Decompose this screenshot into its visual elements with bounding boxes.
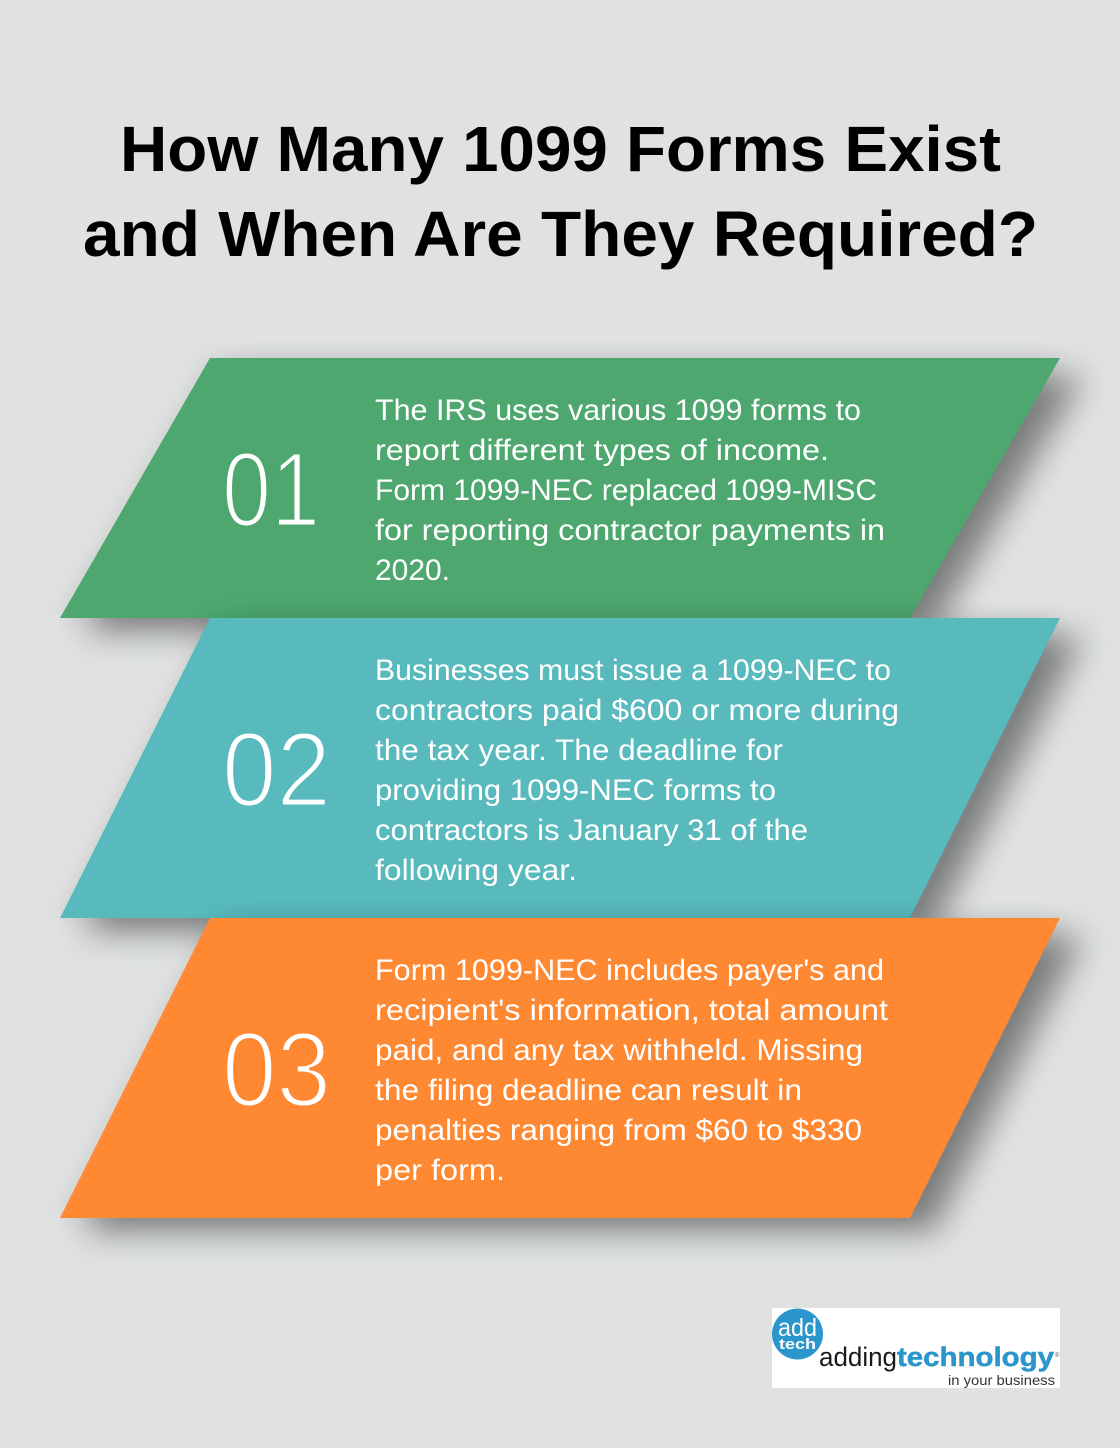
number 02: 02 — [222, 711, 331, 829]
logo: adding technology: ® — [1055, 1352, 1060, 1359]
text block: step 01: report different types of income. — [375, 434, 829, 467]
text block: step 03: penalties ranging from $60 to $330 — [375, 1114, 862, 1147]
text block: step 03: the filing deadline can result in — [375, 1074, 802, 1107]
icon: add tech circle: tech — [779, 1336, 816, 1353]
tagline: in your business — [948, 1372, 1055, 1388]
text block: step 01: The IRS uses various 1099 forms to — [375, 394, 861, 427]
panel: step 01 — [60, 358, 1060, 618]
wordmark: adding — [819, 1342, 897, 1372]
text block: step 02: following year. — [375, 854, 577, 887]
text block: step 02: contractors is January 31 of the — [375, 814, 808, 847]
text block: step 03 — [375, 954, 888, 1187]
text block: step 02: Businesses must issue a 1099-NEC to — [375, 654, 891, 687]
title: How Many 1099 Forms Exist — [120, 113, 1001, 185]
text block: step 02: contractors paid $600 or more during — [375, 694, 899, 727]
title — [83, 113, 1038, 270]
shape: orange parallelogram — [60, 918, 1060, 1218]
text block: step 02: the tax year. The deadline for — [375, 734, 783, 767]
text block: step 02: providing 1099-NEC forms to — [375, 774, 776, 807]
shape: teal parallelogram — [60, 618, 1060, 918]
text block: step 03: Form 1099-NEC includes payer's and — [375, 954, 884, 987]
text block: step 02 — [375, 654, 899, 887]
panel: step 03 — [60, 918, 1060, 1218]
icon: add tech circle — [772, 1308, 823, 1360]
title: and When Are They Required? — [83, 198, 1038, 270]
number 01: 01 — [222, 431, 320, 549]
panel: step 02 — [60, 618, 1060, 918]
logo: adding technology — [772, 1308, 1060, 1388]
icon: add tech circle: add — [778, 1314, 817, 1342]
number 03: 03 — [222, 1011, 331, 1129]
text block: step 01: Form 1099-NEC replaced 1099-MISC — [375, 474, 877, 507]
text block: step 03: recipient's information, total amount — [375, 994, 888, 1027]
shape: green parallelogram — [60, 358, 1060, 618]
text block: step 03: per form. — [375, 1154, 505, 1187]
text block: step 01 — [375, 394, 885, 587]
text block: step 01: 2020. — [375, 554, 450, 587]
text block: step 03: paid, and any tax withheld. Missing — [375, 1034, 863, 1067]
logo: adding technology: technology — [897, 1342, 1054, 1372]
text block: step 01: for reporting contractor payments in — [375, 514, 885, 547]
